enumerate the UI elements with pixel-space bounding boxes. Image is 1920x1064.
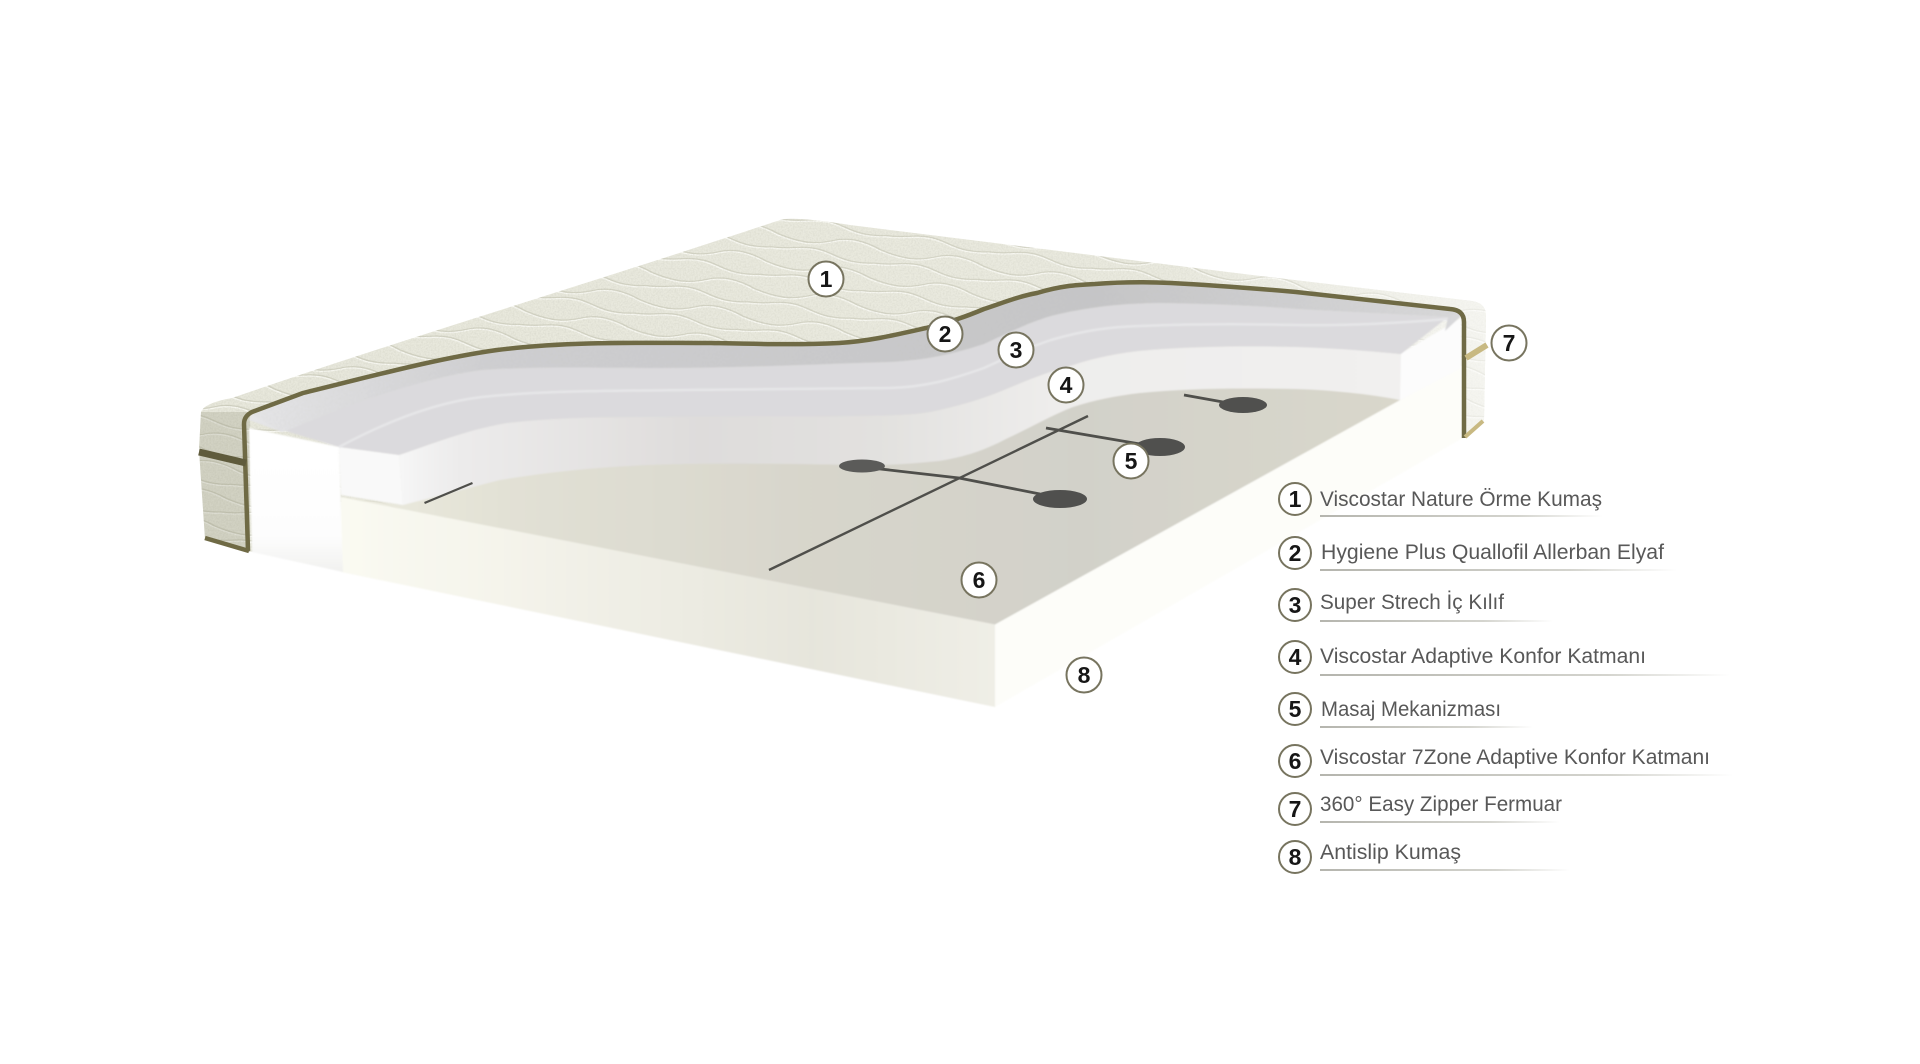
- wire: left node to lower disc: [863, 467, 1040, 494]
- wire: middle disc: [1046, 428, 1140, 444]
- legend item 6: [1279, 745, 1733, 777]
- right white foam block: [1400, 318, 1461, 400]
- legend item 8: Antislip Kumaş: [1320, 841, 1461, 864]
- legend item 7: 7: [1289, 796, 1301, 822]
- badge 2: 2: [939, 321, 951, 347]
- badge 4: [1048, 368, 1084, 402]
- right zipper band: [1466, 345, 1487, 358]
- right bottom edge: [1465, 421, 1483, 437]
- massage disc: left: [839, 460, 885, 472]
- legend item 4: 4: [1289, 644, 1302, 670]
- badge 5: 5: [1125, 448, 1138, 474]
- base foam front face: [341, 497, 995, 707]
- wire: right disc: [1184, 395, 1223, 402]
- wire: short left: [424, 483, 472, 503]
- massage disc: middle: [1135, 438, 1185, 456]
- legend item 8: [1279, 841, 1570, 873]
- badge 1: [808, 262, 844, 296]
- badge 7: 7: [1503, 330, 1515, 356]
- badge 6: [962, 562, 996, 598]
- comfort layer inner wall: [399, 346, 1401, 505]
- badge 6: 6: [973, 567, 985, 593]
- olive cover piping: [244, 282, 1464, 551]
- badge 4: 4: [1060, 372, 1073, 398]
- legend item 2: 2: [1289, 540, 1301, 566]
- massage disc: right: [1219, 397, 1267, 413]
- badge 3: [998, 332, 1034, 368]
- legend list: [1279, 483, 1733, 873]
- quilted knit cover: [190, 210, 1490, 560]
- legend item 5: 5: [1289, 696, 1302, 722]
- fibre texture: [250, 280, 1465, 435]
- legend item 6: 6: [1289, 748, 1301, 774]
- legend item 4: Viscostar Adaptive Konfor Katmanı: [1320, 645, 1646, 668]
- wire: long diagonal: [769, 416, 1088, 570]
- legend item 1: Viscostar Nature Örme Kumaş: [1320, 488, 1602, 511]
- badge 8: [1066, 658, 1102, 692]
- legend item 4: [1279, 641, 1730, 676]
- badge 8: 8: [1078, 662, 1091, 688]
- badge 1: 1: [820, 266, 833, 292]
- badge 3: 3: [1010, 337, 1022, 363]
- legend item 3: Super Strech İç Kılıf: [1320, 591, 1504, 614]
- legend item 2: [1279, 537, 1677, 571]
- massage disc: lower: [1033, 490, 1087, 508]
- internal foam layers: [249, 280, 1465, 707]
- left comfort block face: [339, 447, 403, 505]
- base foam top surface: [341, 350, 1400, 624]
- left bottom edge: [205, 538, 249, 551]
- legend item 7: 360° Easy Zipper Fermuar: [1320, 793, 1562, 816]
- legend item 1: 1: [1289, 486, 1302, 512]
- massage zone wiring: [424, 395, 1267, 570]
- left zipper band: [199, 452, 246, 463]
- legend item 6: Viscostar 7Zone Adaptive Konfor Katmanı: [1320, 746, 1710, 769]
- legend item 5: Masaj Mekanizması: [1321, 698, 1501, 721]
- inner band highlight: [339, 319, 1448, 447]
- legend item 2: Hygiene Plus Quallofil Allerban Elyaf: [1321, 541, 1664, 564]
- legend item 3: [1279, 589, 1553, 622]
- badge 2: [928, 316, 962, 352]
- legend item 8: 8: [1289, 844, 1302, 870]
- badge 5: [1114, 444, 1148, 478]
- legend item 5: [1279, 693, 1533, 728]
- left white foam block: [249, 428, 343, 572]
- legend item 1: [1279, 483, 1603, 517]
- badge 7: [1492, 326, 1526, 360]
- legend item 7: [1279, 793, 1562, 825]
- mattress cross-section illustration: [190, 210, 1490, 707]
- fibre wadding layer: [249, 282, 1460, 432]
- light grey stretch inner cover layer: [249, 303, 1448, 455]
- legend item 3: 3: [1289, 592, 1301, 618]
- number badges on mattress: [808, 262, 1526, 692]
- base foam right face: [995, 365, 1462, 707]
